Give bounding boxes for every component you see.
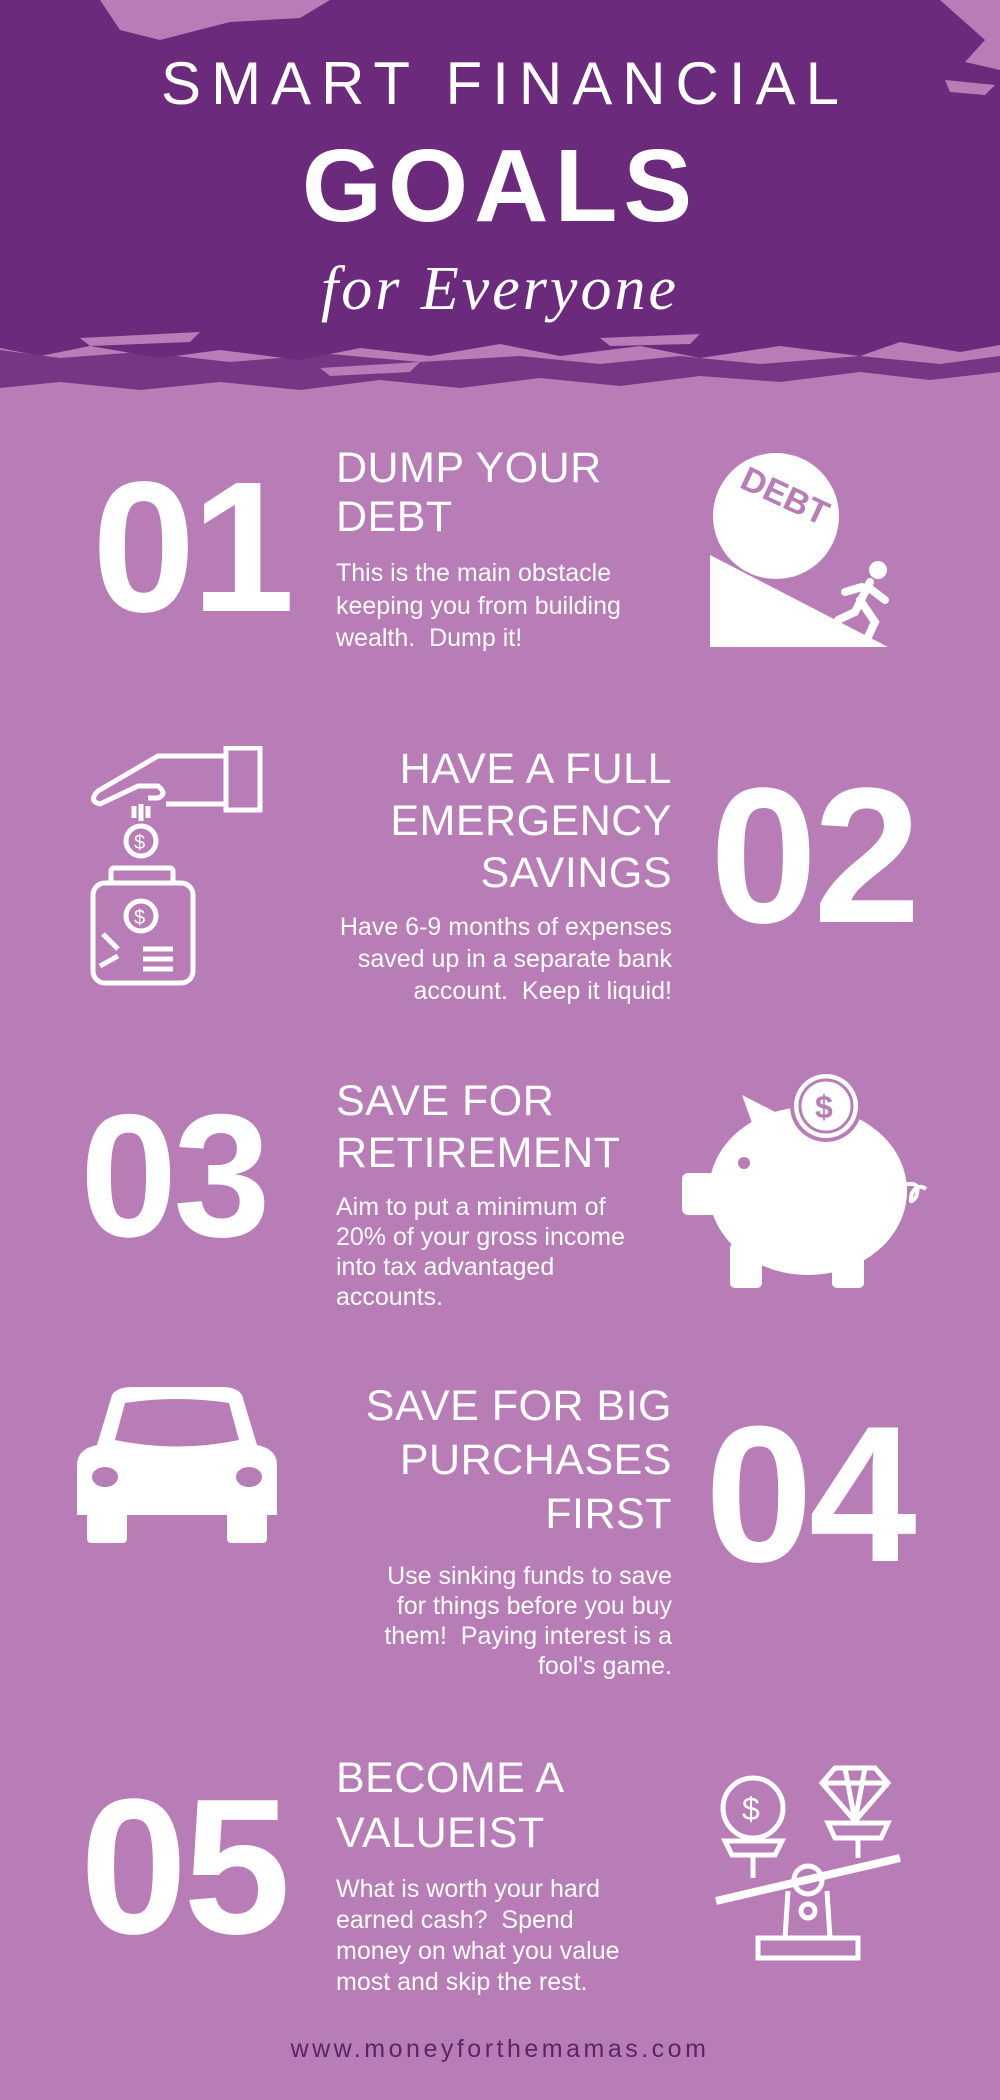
icon: car [77,1387,277,1543]
body text 05: What is worth your hard [336,1875,600,1903]
number 03: 03 [80,1079,267,1274]
heading: valueist [336,1754,565,1857]
body text 01: wealth. Dump it! [336,624,522,652]
title [161,50,849,323]
heading: big purchases: SAVE FOR BIG [366,1382,672,1430]
body text 04: for things before you buy [397,1592,672,1620]
heading: big purchases [366,1382,672,1538]
heading: emergency savings [390,745,672,897]
section 02 [90,745,917,1005]
title: for Everyone [321,255,679,323]
heading: retirement [336,1077,620,1177]
number 05: 05 [80,1758,287,1974]
body text 04 [384,1562,672,1680]
header banner [0,0,1000,390]
section 05 [80,1754,901,1996]
heading: emergency savings: SAVINGS [481,849,672,897]
heading: valueist: BECOME A [336,1754,565,1802]
icon: hand and coin jar: $ [134,907,145,929]
body text 05: money on what you value [336,1937,620,1965]
heading: big purchases: PURCHASES [400,1436,672,1484]
body text 05 [336,1875,620,1996]
icon: balance scale [715,1766,901,1960]
number 04: 04 [705,1386,913,1603]
section 03 [80,1074,928,1311]
body text 03: into tax advantaged [336,1253,554,1281]
body text 01 [336,559,621,652]
number 02: 02 [710,747,917,963]
body text 05: most and skip the rest. [336,1968,588,1996]
icon: hand and coin jar: $ [134,832,145,854]
title: SMART FINANCIAL [161,50,849,117]
heading: big purchases: FIRST [545,1490,672,1538]
heading: dump your debt: DUMP YOUR [336,444,602,492]
body text 02 [340,913,672,1005]
body text 03: Aim to put a minimum of [336,1193,606,1221]
icon: piggy bank: $ [815,1089,833,1125]
body text 01: keeping you from building [336,592,621,620]
body text 04: Use sinking funds to save [387,1562,672,1590]
heading: emergency savings: HAVE A FULL [400,745,672,793]
body text 03: accounts. [336,1283,443,1311]
body text 04: them! Paying interest is a [384,1622,672,1650]
icon: piggy bank [682,1074,928,1288]
body text 02: account. Keep it liquid! [414,977,672,1005]
title: GOALS [302,128,698,243]
icon: debt boulder: DEBT [735,460,835,533]
heading: emergency savings: EMERGENCY [390,797,672,845]
number 01: 01 [92,444,291,651]
body text 02: saved up in a separate bank [358,945,672,973]
heading: dump your debt [336,444,602,541]
body text 02: Have 6-9 months of expenses [340,913,672,941]
section 04 [77,1382,916,1680]
footer url: www.moneyforthemamas.com [291,2035,709,2063]
heading: retirement: RETIREMENT [336,1129,620,1177]
body text 04: fool's game. [538,1652,672,1680]
icon: debt boulder [710,453,889,647]
body text 05: earned cash? Spend [336,1906,574,1934]
body text 03 [336,1193,625,1311]
heading: dump your debt: DEBT [336,493,453,541]
body text 03: 20% of your gross income [336,1223,625,1251]
heading: valueist: VALUEIST [336,1809,545,1857]
section 01 [92,444,889,652]
heading: retirement: SAVE FOR [336,1077,554,1125]
body text 01: This is the main obstacle [336,559,611,587]
icon: hand and coin jar [90,746,262,986]
icon: balance scale: $ [742,1791,760,1827]
